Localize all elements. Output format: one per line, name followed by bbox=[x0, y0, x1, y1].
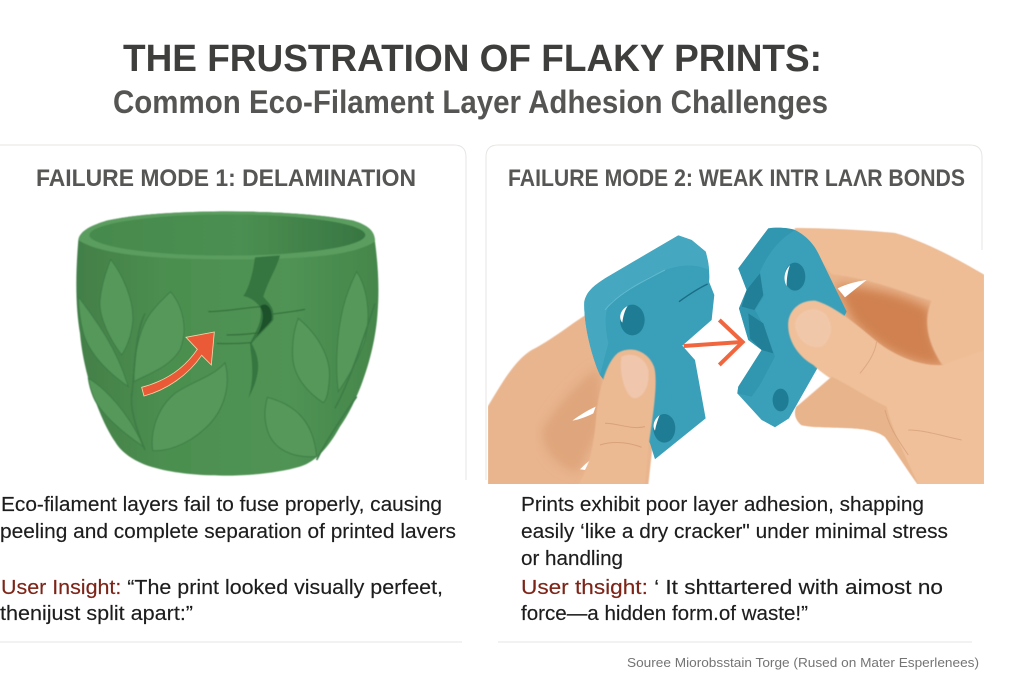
blue part: right half bbox=[737, 228, 847, 427]
heading: failure mode 1: FAILURE MODE 1: DELAMINATION bbox=[36, 165, 416, 192]
left hand bbox=[488, 313, 655, 485]
text: description 2: easily ‘like a dry cracker" under minimal stress bbox=[521, 521, 948, 543]
text: user insight 1: User Insight: “The print looked visually perfeet, bbox=[1, 577, 443, 599]
arrow: red curved arrow bbox=[142, 332, 214, 396]
heading: failure mode 2: FAILURE MODE 2: WEAK INTR LAɅR BONDS bbox=[508, 165, 965, 192]
right hand bbox=[785, 228, 984, 485]
panel: failure mode 2 bbox=[486, 145, 984, 642]
text: description 1: peeling and complete separation of printed lavers bbox=[0, 521, 456, 543]
subtitle: Common Eco-Filament Layer Adhesion Challenges bbox=[113, 84, 828, 120]
text: description 2: Prints exhibit poor layer adhesion, shapping bbox=[521, 494, 924, 516]
blue part: left half bbox=[584, 235, 714, 459]
text: user insight 1 bbox=[0, 577, 443, 625]
thumb: right hand bbox=[788, 301, 984, 485]
text: description 2: or handling bbox=[521, 548, 623, 570]
image: hands snapping blue part bbox=[488, 228, 984, 485]
text: user insight 1: thenijust split apart:” bbox=[0, 603, 193, 625]
text: description 2 bbox=[521, 494, 948, 570]
text: description 1: Eco-filament layers fail to fuse properly, causing bbox=[1, 494, 442, 516]
text: user insight 2 bbox=[521, 577, 943, 625]
image: cracked green pot bbox=[76, 211, 378, 476]
panel: failure mode 1 bbox=[0, 145, 466, 642]
arrow: red double-sided arrow bbox=[684, 320, 743, 365]
text: user insight 2: force—a hidden form.of waste!” bbox=[521, 603, 808, 625]
title: THE FRUSTRATION OF FLAKY PRINTS: bbox=[123, 38, 822, 80]
text: user insight 2: User thsight: ‘ It shttartered with aimost no bbox=[521, 577, 943, 599]
card outline 2 bbox=[486, 145, 982, 642]
text: description 1 bbox=[0, 494, 456, 543]
card outline 1 bbox=[0, 145, 466, 642]
source footnote: Souree Miorobsstain Torge (Rused on Mater Esperlenees) bbox=[627, 655, 979, 670]
thumb: left hand bbox=[585, 348, 656, 470]
